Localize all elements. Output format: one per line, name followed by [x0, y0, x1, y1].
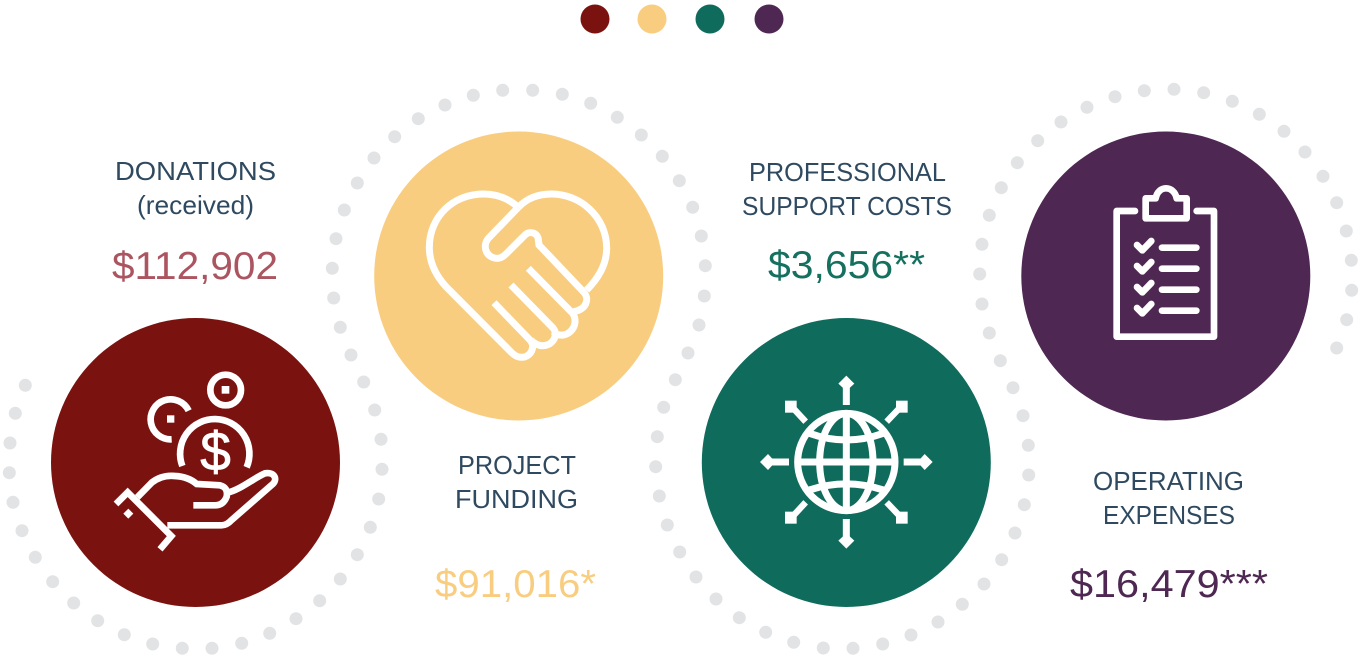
icon: globe with arrows	[760, 376, 933, 549]
heading: operating expenses: EXPENSES	[1103, 500, 1235, 530]
red circle	[51, 318, 340, 607]
icon: heart handshake	[429, 194, 607, 357]
icon: hand holding coins	[116, 375, 275, 549]
heading: project funding: PROJECT	[458, 450, 576, 480]
amount: professional support costs: $3,656**	[768, 244, 925, 287]
green circle	[702, 318, 991, 607]
heading: professional support costs: SUPPORT COSTS	[742, 191, 952, 221]
dotted ring: operating expenses	[973, 83, 1358, 355]
panel: professional support costs	[649, 157, 1035, 655]
amount: operating expenses: $16,479***	[1070, 563, 1268, 606]
panel: operating expenses	[973, 83, 1358, 606]
heading: donations: (received)	[137, 190, 254, 220]
heading: operating expenses	[1093, 466, 1244, 530]
heading: donations	[115, 156, 276, 220]
yellow circle	[374, 132, 663, 420]
dotted ring: donations	[3, 379, 389, 655]
panel: donations	[3, 156, 389, 655]
icon: clipboard checklist	[1117, 188, 1214, 337]
heading: project funding	[455, 450, 578, 514]
heading: operating expenses: OPERATING	[1093, 466, 1244, 496]
heading: project funding: FUNDING	[455, 484, 578, 514]
heading: professional support costs	[742, 157, 952, 221]
amount: project funding: $91,016*	[435, 563, 596, 606]
heading: donations: DONATIONS	[115, 156, 276, 186]
heading: professional support costs: PROFESSIONAL	[749, 157, 946, 187]
icon: hand holding coins: $	[200, 420, 231, 482]
dotted ring: professional support costs	[649, 354, 1035, 655]
panel: project funding	[326, 84, 712, 606]
amount: donations: $112,902	[112, 245, 278, 288]
purple circle	[1021, 132, 1310, 420]
colour key dots	[580, 4, 784, 34]
dotted ring: project funding	[326, 84, 712, 389]
